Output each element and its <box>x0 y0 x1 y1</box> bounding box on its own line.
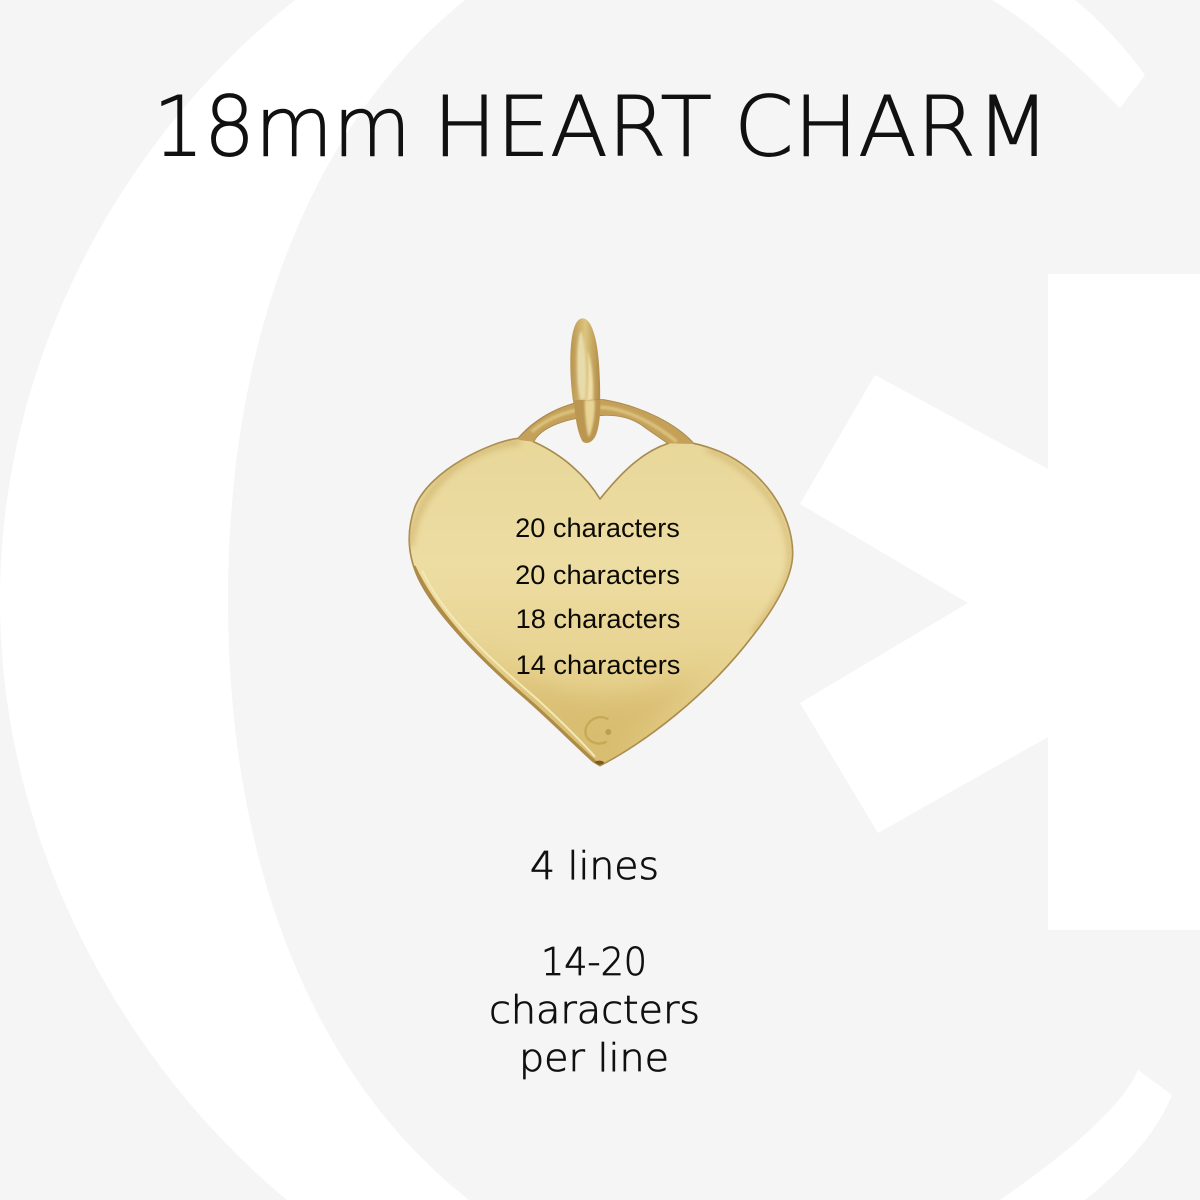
ring lower highlight <box>585 400 595 437</box>
ring highlight <box>587 350 593 403</box>
tip shadow <box>595 761 604 765</box>
specification text <box>489 844 700 1080</box>
lower shadow <box>500 668 693 766</box>
mark dot <box>605 729 611 735</box>
line 4: 14 characters <box>516 649 680 680</box>
heart plate <box>409 400 793 773</box>
plate shading <box>410 400 790 773</box>
line count: 4 lines <box>530 844 659 888</box>
mark letter C <box>585 717 608 743</box>
lower left rim highlight <box>422 571 595 757</box>
watermark crescent <box>0 0 469 1200</box>
jump ring front <box>574 400 600 443</box>
plate fill <box>409 400 793 766</box>
maker's mark <box>585 717 611 743</box>
title <box>153 78 1050 176</box>
title word heart: HEART <box>433 78 712 176</box>
top left edge tone <box>410 442 520 547</box>
characters label: characters <box>489 988 700 1032</box>
bail highlight <box>532 407 677 442</box>
character range: 14-20 <box>541 940 647 984</box>
line 2: 20 characters <box>515 559 680 590</box>
right edge tone <box>707 448 790 633</box>
heart charm <box>409 318 793 773</box>
line 1: 20 characters <box>515 512 680 543</box>
ring outer band <box>570 318 600 420</box>
title size: 18mm <box>153 78 411 176</box>
watermark bar and chevron <box>800 274 1200 930</box>
ring inner opening <box>577 331 586 400</box>
ring lower band <box>574 400 600 443</box>
watermark top arc tip <box>992 0 1145 108</box>
jump ring back <box>570 318 600 420</box>
line 3: 18 characters <box>516 603 680 634</box>
engraving guide text <box>515 512 680 680</box>
title word charm: CHARM <box>734 78 1050 176</box>
watermark bottom arc tip <box>1000 1070 1172 1200</box>
lower left dark rim <box>413 567 598 766</box>
per line label: per line <box>519 1036 669 1080</box>
bail band <box>518 400 694 444</box>
